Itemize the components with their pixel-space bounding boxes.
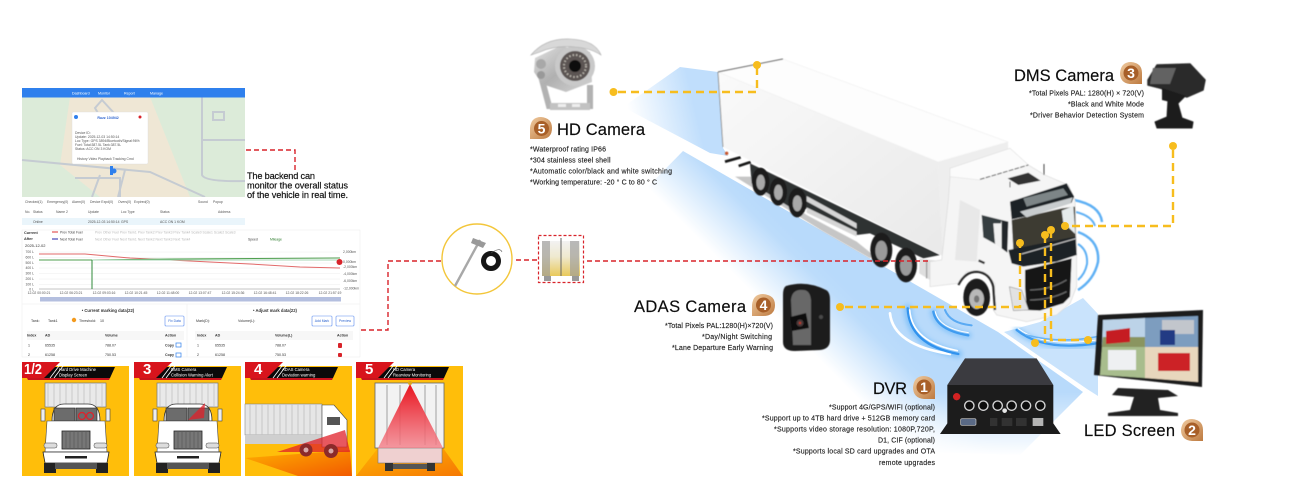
graphic: signal waves bbox=[890, 308, 1097, 354]
marking data tables: • Current marking data(22) bbox=[82, 308, 135, 313]
panel: map dashboard: Update bbox=[88, 210, 99, 214]
panel: map dashboard: Name 2 bbox=[56, 210, 68, 214]
side window bbox=[982, 215, 1002, 244]
arrow: chart to fuel sensor bbox=[361, 261, 441, 330]
callout: HD camera: *304 stainless steel shell bbox=[530, 158, 611, 164]
chart: 700 L bbox=[26, 250, 34, 254]
panel: fuel chart dashboard: 61258 bbox=[45, 353, 55, 357]
panel: fuel chart dashboard: Add Mark bbox=[315, 319, 330, 323]
chart bbox=[26, 250, 359, 302]
panel: road background bbox=[623, 67, 1100, 456]
chart: 200 L bbox=[26, 277, 34, 281]
panel: map dashboard: Address bbox=[218, 210, 231, 214]
callout: DVR: DVR bbox=[873, 380, 907, 398]
chart: 100 L bbox=[26, 282, 34, 286]
panel: fuel chart dashboard bbox=[22, 230, 360, 357]
panel: warning card 5: 5 bbox=[365, 361, 373, 378]
callout: DVR: *Support 4G/GPS/WIFI (optional) bbox=[829, 404, 935, 412]
panel: fuel chart dashboard: Volume bbox=[105, 334, 118, 338]
panel: fuel chart dashboard: Action bbox=[165, 334, 176, 338]
panel: warning card 4: ADAS Camera bbox=[282, 367, 310, 372]
panel: fuel chart dashboard: Prev Total Fuel bbox=[60, 230, 83, 234]
panel: fuel chart dashboard: Index bbox=[27, 334, 36, 338]
panel: warning card 4: Deviation warning bbox=[282, 372, 316, 378]
chart: 12-02 18:22:26 bbox=[286, 291, 309, 295]
callout: DVR bbox=[762, 376, 936, 467]
chart: 0,000km bbox=[343, 260, 356, 264]
panel: map dashboard: Report bbox=[124, 92, 135, 96]
map area bbox=[22, 97, 245, 197]
callout: ADAS camera: ADAS Camera bbox=[634, 298, 747, 316]
panel: fuel chart dashboard: 2 bbox=[197, 353, 199, 357]
panel: warning card 5: Rearview Monitoring bbox=[393, 372, 432, 378]
callout: DMS camera: *Black and White Mode bbox=[1068, 102, 1144, 108]
panel: map dashboard: History Video Playback Tracking Cmd bbox=[77, 157, 134, 161]
grille bbox=[1025, 258, 1072, 311]
panel: fuel chart dashboard: 750.53 bbox=[105, 353, 116, 357]
badge 1: 1 bbox=[920, 379, 928, 395]
chart: -12,000km bbox=[343, 286, 359, 290]
panel: warning card 5: HD Camera bbox=[393, 367, 416, 372]
panel: warning card 5 bbox=[356, 361, 463, 476]
chart: 12-02 09:03:16 bbox=[93, 291, 116, 295]
dash band bbox=[1008, 237, 1077, 267]
panel: map dashboard: Loc Type bbox=[121, 210, 135, 214]
panel: map dashboard: Overs(0) bbox=[118, 200, 131, 204]
trailer underbody bbox=[725, 152, 950, 282]
callout: DVR: *Support up to 4TB hard drive + 512GB memory card bbox=[762, 416, 935, 422]
chart: -6,000km bbox=[343, 279, 357, 283]
panel: fuel chart dashboard: Next Total Fuel bbox=[60, 238, 83, 242]
panel: fuel chart dashboard: Copy bbox=[165, 344, 174, 348]
panel: fuel chart dashboard: Speed bbox=[248, 238, 258, 242]
chart: 12-02 11:48:00 bbox=[157, 291, 179, 295]
panel: map dashboard: Ruzz 104942 bbox=[97, 116, 119, 120]
callout: ADAS camera bbox=[634, 294, 775, 352]
panel: map dashboard: Fuel: Total:387.5L Tank:387.5L bbox=[75, 143, 121, 147]
cab bbox=[930, 148, 1077, 322]
panel: map dashboard: Status bbox=[160, 210, 170, 214]
vehicle table bbox=[22, 197, 245, 226]
panel: fuel chart dashboard: AD bbox=[45, 334, 51, 338]
panel: map dashboard: Expired(0) bbox=[134, 200, 150, 204]
chart: 12-02 10:21:45 bbox=[125, 291, 148, 295]
icon: ADAS camera bbox=[783, 284, 830, 351]
callout: DMS camera: *Total Pixels PAL: 1280(H) × 720(V) bbox=[1029, 90, 1144, 98]
panel: fuel chart dashboard: 10 bbox=[100, 319, 104, 323]
panel: warning card 1/2: Display Screen bbox=[59, 372, 88, 378]
panel: warning card 1/2 bbox=[22, 361, 129, 476]
panel: map dashboard: Loc Type: GPS 3894/Bluetooth/Signal:96% bbox=[75, 139, 140, 143]
callout: HD camera: *Waterproof rating IP66 bbox=[530, 146, 606, 154]
chart: 0 L bbox=[29, 288, 34, 292]
text: backend note: The backend can bbox=[247, 171, 315, 181]
panel: fuel chart dashboard: Action bbox=[337, 334, 348, 338]
panel: map dashboard: Checked(1) bbox=[25, 200, 43, 204]
panel: map dashboard: Monitor bbox=[98, 92, 111, 96]
windshield bbox=[1012, 207, 1076, 250]
arrow: tank to truck bbox=[587, 260, 930, 262]
chart: 12-02 06:23:21 bbox=[60, 291, 83, 295]
graphic: signal waves at cab front bbox=[1074, 200, 1102, 290]
panel: fuel chart dashboard: 1 bbox=[197, 344, 199, 348]
card header bbox=[250, 378, 333, 380]
panel: fuel chart dashboard: After bbox=[24, 237, 33, 241]
panel: fuel chart dashboard: Tank: bbox=[31, 319, 40, 323]
panel: map dashboard bbox=[22, 88, 245, 226]
chart: -2,000km bbox=[343, 265, 357, 269]
chart: 600 L bbox=[26, 256, 34, 260]
connector: LED screen bbox=[1047, 226, 1092, 344]
callout: LED screen: LED Screen bbox=[1084, 422, 1175, 440]
panel: map dashboard: Emergency(0) bbox=[47, 200, 68, 204]
panel: fuel chart dashboard: Volume(L) bbox=[275, 334, 293, 338]
panel: fuel chart dashboard: 788.07 bbox=[105, 344, 116, 348]
panel: map dashboard: ACC ON 1 KOM bbox=[160, 220, 185, 224]
icon: fuel sensor bbox=[442, 224, 512, 294]
callout: DMS camera bbox=[1014, 62, 1144, 120]
badge 5: 5 bbox=[538, 120, 546, 136]
panel: warning card 3: DMS Camera bbox=[171, 367, 197, 372]
panel: warning card 1/2: Hard Drive Machine bbox=[59, 367, 97, 372]
panel: warning card 3 bbox=[134, 361, 241, 476]
icon: LED screen bbox=[1094, 310, 1203, 416]
panel: warning card 3: 3 bbox=[143, 361, 151, 378]
card header bbox=[361, 378, 444, 380]
chart: -4,000km bbox=[343, 272, 357, 276]
visor bbox=[1010, 183, 1074, 219]
panel: fuel chart dashboard: Threshold: bbox=[79, 319, 96, 323]
callout: DVR: D1, CIF (optional) bbox=[878, 438, 935, 444]
panel: fuel chart dashboard: Preview bbox=[339, 319, 352, 323]
badge 2: 2 bbox=[1188, 422, 1196, 438]
panel: warning card 3: Collision Warning Alert bbox=[171, 372, 214, 378]
panel: fuel chart dashboard: Prev Other Fuel Prev Tank1 Prev Tank2 Prev Tank3 Prev Tank4 Scale0 Scale1 Scale2 Scale3 bbox=[95, 230, 236, 234]
panel: fuel chart dashboard: 2025-12-02 bbox=[25, 243, 46, 248]
panel: fuel chart dashboard: 2 bbox=[28, 353, 30, 357]
panel: map dashboard: No. bbox=[25, 210, 30, 214]
callout: ADAS camera: *Lane Departure Early Warning bbox=[672, 345, 773, 352]
panel: map dashboard: Status bbox=[33, 210, 43, 214]
text: backend note: monitor the overall status bbox=[247, 180, 348, 190]
panel: fuel chart dashboard: Next Other Fuel Next Tank1 Next Tank2 Next Tank3 Next Tank4 bbox=[95, 238, 190, 242]
callout: DVR: remote upgrades bbox=[879, 460, 936, 467]
connector: ADAS camera bbox=[836, 239, 1024, 311]
card header bbox=[27, 378, 110, 380]
icon: DVR bbox=[940, 358, 1061, 434]
arrow: map to note bbox=[246, 150, 295, 171]
callout: DVR: *Supports local SD card upgrades and OTA bbox=[793, 448, 935, 456]
popup bbox=[72, 112, 148, 164]
chart: 12-02 13:07:47 bbox=[189, 291, 212, 295]
panel: map dashboard: Update: 2025-12-03 14:50:14 bbox=[75, 135, 119, 139]
panel: fuel chart dashboard: Current bbox=[24, 231, 38, 235]
chart: 12-02 21:57:19 bbox=[319, 291, 342, 295]
panel: fuel chart dashboard: 65535 bbox=[45, 344, 55, 348]
image: truck bbox=[718, 59, 1077, 322]
callout: HD camera: *Working temperature: -20 ° C to 80 ° C bbox=[530, 178, 657, 186]
panel: warning card 4: 4 bbox=[254, 361, 263, 378]
callout: DVR: *Supports video storage resolution: 1080P,720P, bbox=[774, 426, 935, 434]
connector: HD camera bbox=[610, 61, 761, 96]
panel: map dashboard: Sound bbox=[198, 200, 208, 204]
panel: fuel chart dashboard: 1 bbox=[28, 344, 30, 348]
chart: 300 L bbox=[26, 272, 34, 276]
panel: warning card 4 bbox=[245, 361, 352, 476]
icon: fuel tank bbox=[538, 236, 584, 282]
callout: ADAS camera: *Total Pixels PAL:1280(H)×720(V) bbox=[665, 323, 773, 330]
panel: map dashboard: Device ID: bbox=[75, 131, 91, 135]
badge 4: 4 bbox=[760, 297, 768, 313]
text: backend note bbox=[247, 171, 348, 200]
badge 1 bbox=[913, 376, 935, 399]
panel: fuel chart dashboard: 61258 bbox=[215, 353, 225, 357]
panel: fuel chart dashboard: Tank1 bbox=[48, 319, 58, 323]
panel: map dashboard: Alarm(0) bbox=[72, 200, 85, 204]
text: backend note: of the vehicle in real time. bbox=[247, 190, 348, 200]
panel: map dashboard: Device Expd(0) bbox=[90, 200, 113, 204]
panel: map dashboard: Manage bbox=[150, 92, 163, 96]
badge 3: 3 bbox=[1127, 65, 1135, 81]
panel: map dashboard: Popup bbox=[213, 200, 223, 204]
vehicle marker bbox=[110, 166, 113, 175]
panel: fuel chart dashboard: Copy bbox=[165, 353, 174, 357]
chart: 12-02 15:24:36 bbox=[222, 291, 245, 295]
chart: 12-02 16:48:41 bbox=[254, 291, 277, 295]
panel: warning card 1/2: 1/2 bbox=[24, 361, 42, 378]
callout: ADAS camera: *Day/Night Switching bbox=[702, 334, 772, 341]
chart: 400 L bbox=[26, 266, 34, 270]
arrow: sensor to tank bbox=[516, 259, 538, 261]
callout: LED screen bbox=[1084, 419, 1203, 441]
panel: fuel chart dashboard: 65535 bbox=[215, 344, 225, 348]
chart: 2,000km bbox=[343, 250, 356, 254]
header bar bbox=[22, 88, 245, 98]
badge 5 bbox=[530, 117, 552, 139]
panel: map dashboard: Online bbox=[33, 220, 43, 224]
badge 4 bbox=[752, 294, 775, 316]
panel: map dashboard: Dashboard bbox=[72, 92, 90, 96]
callout: HD camera: *Automatic color/black and white switching bbox=[530, 168, 672, 176]
callout: HD camera bbox=[530, 117, 672, 186]
callout: HD camera: HD Camera bbox=[557, 121, 646, 139]
icon: HD camera bbox=[531, 39, 601, 110]
panel: fuel chart dashboard: 750.53 bbox=[275, 353, 286, 357]
connector: DMS camera bbox=[1061, 142, 1177, 230]
panel: map dashboard: GPS bbox=[121, 220, 129, 224]
panel: map dashboard: 2025-12-03 14:50:14 bbox=[88, 220, 120, 224]
callout: DMS camera: DMS Camera bbox=[1014, 67, 1115, 85]
card header bbox=[139, 378, 222, 380]
connector: DVR bbox=[1031, 231, 1049, 347]
panel: fuel chart dashboard: Mark(D): bbox=[196, 319, 210, 323]
panel: fuel chart dashboard: AD bbox=[215, 334, 221, 338]
panel: fuel chart dashboard: Volume(L): bbox=[238, 319, 255, 323]
callout: DMS camera: *Driver Behavior Detection System bbox=[1030, 112, 1144, 120]
wheel arch and wheel bbox=[958, 272, 995, 310]
screen views bbox=[1100, 316, 1198, 382]
trailer box bbox=[718, 72, 943, 256]
chart: 12-02 00:00:21 bbox=[28, 291, 51, 295]
panel: fuel chart dashboard: Mileage bbox=[270, 238, 282, 242]
panel: fuel chart dashboard: 788.07 bbox=[275, 344, 286, 348]
panel: map dashboard: Status: ACC ON 3 KOM bbox=[75, 147, 111, 151]
chart: 500 L bbox=[26, 261, 34, 265]
headlight bbox=[1009, 287, 1029, 311]
panel: fuel chart dashboard: Fix Data bbox=[168, 319, 181, 323]
panel: fuel chart dashboard: Index bbox=[197, 334, 206, 338]
icon: DMS camera bbox=[1148, 64, 1205, 128]
panel: fuel chart dashboard: • Adjust mark data(22) bbox=[253, 308, 298, 313]
